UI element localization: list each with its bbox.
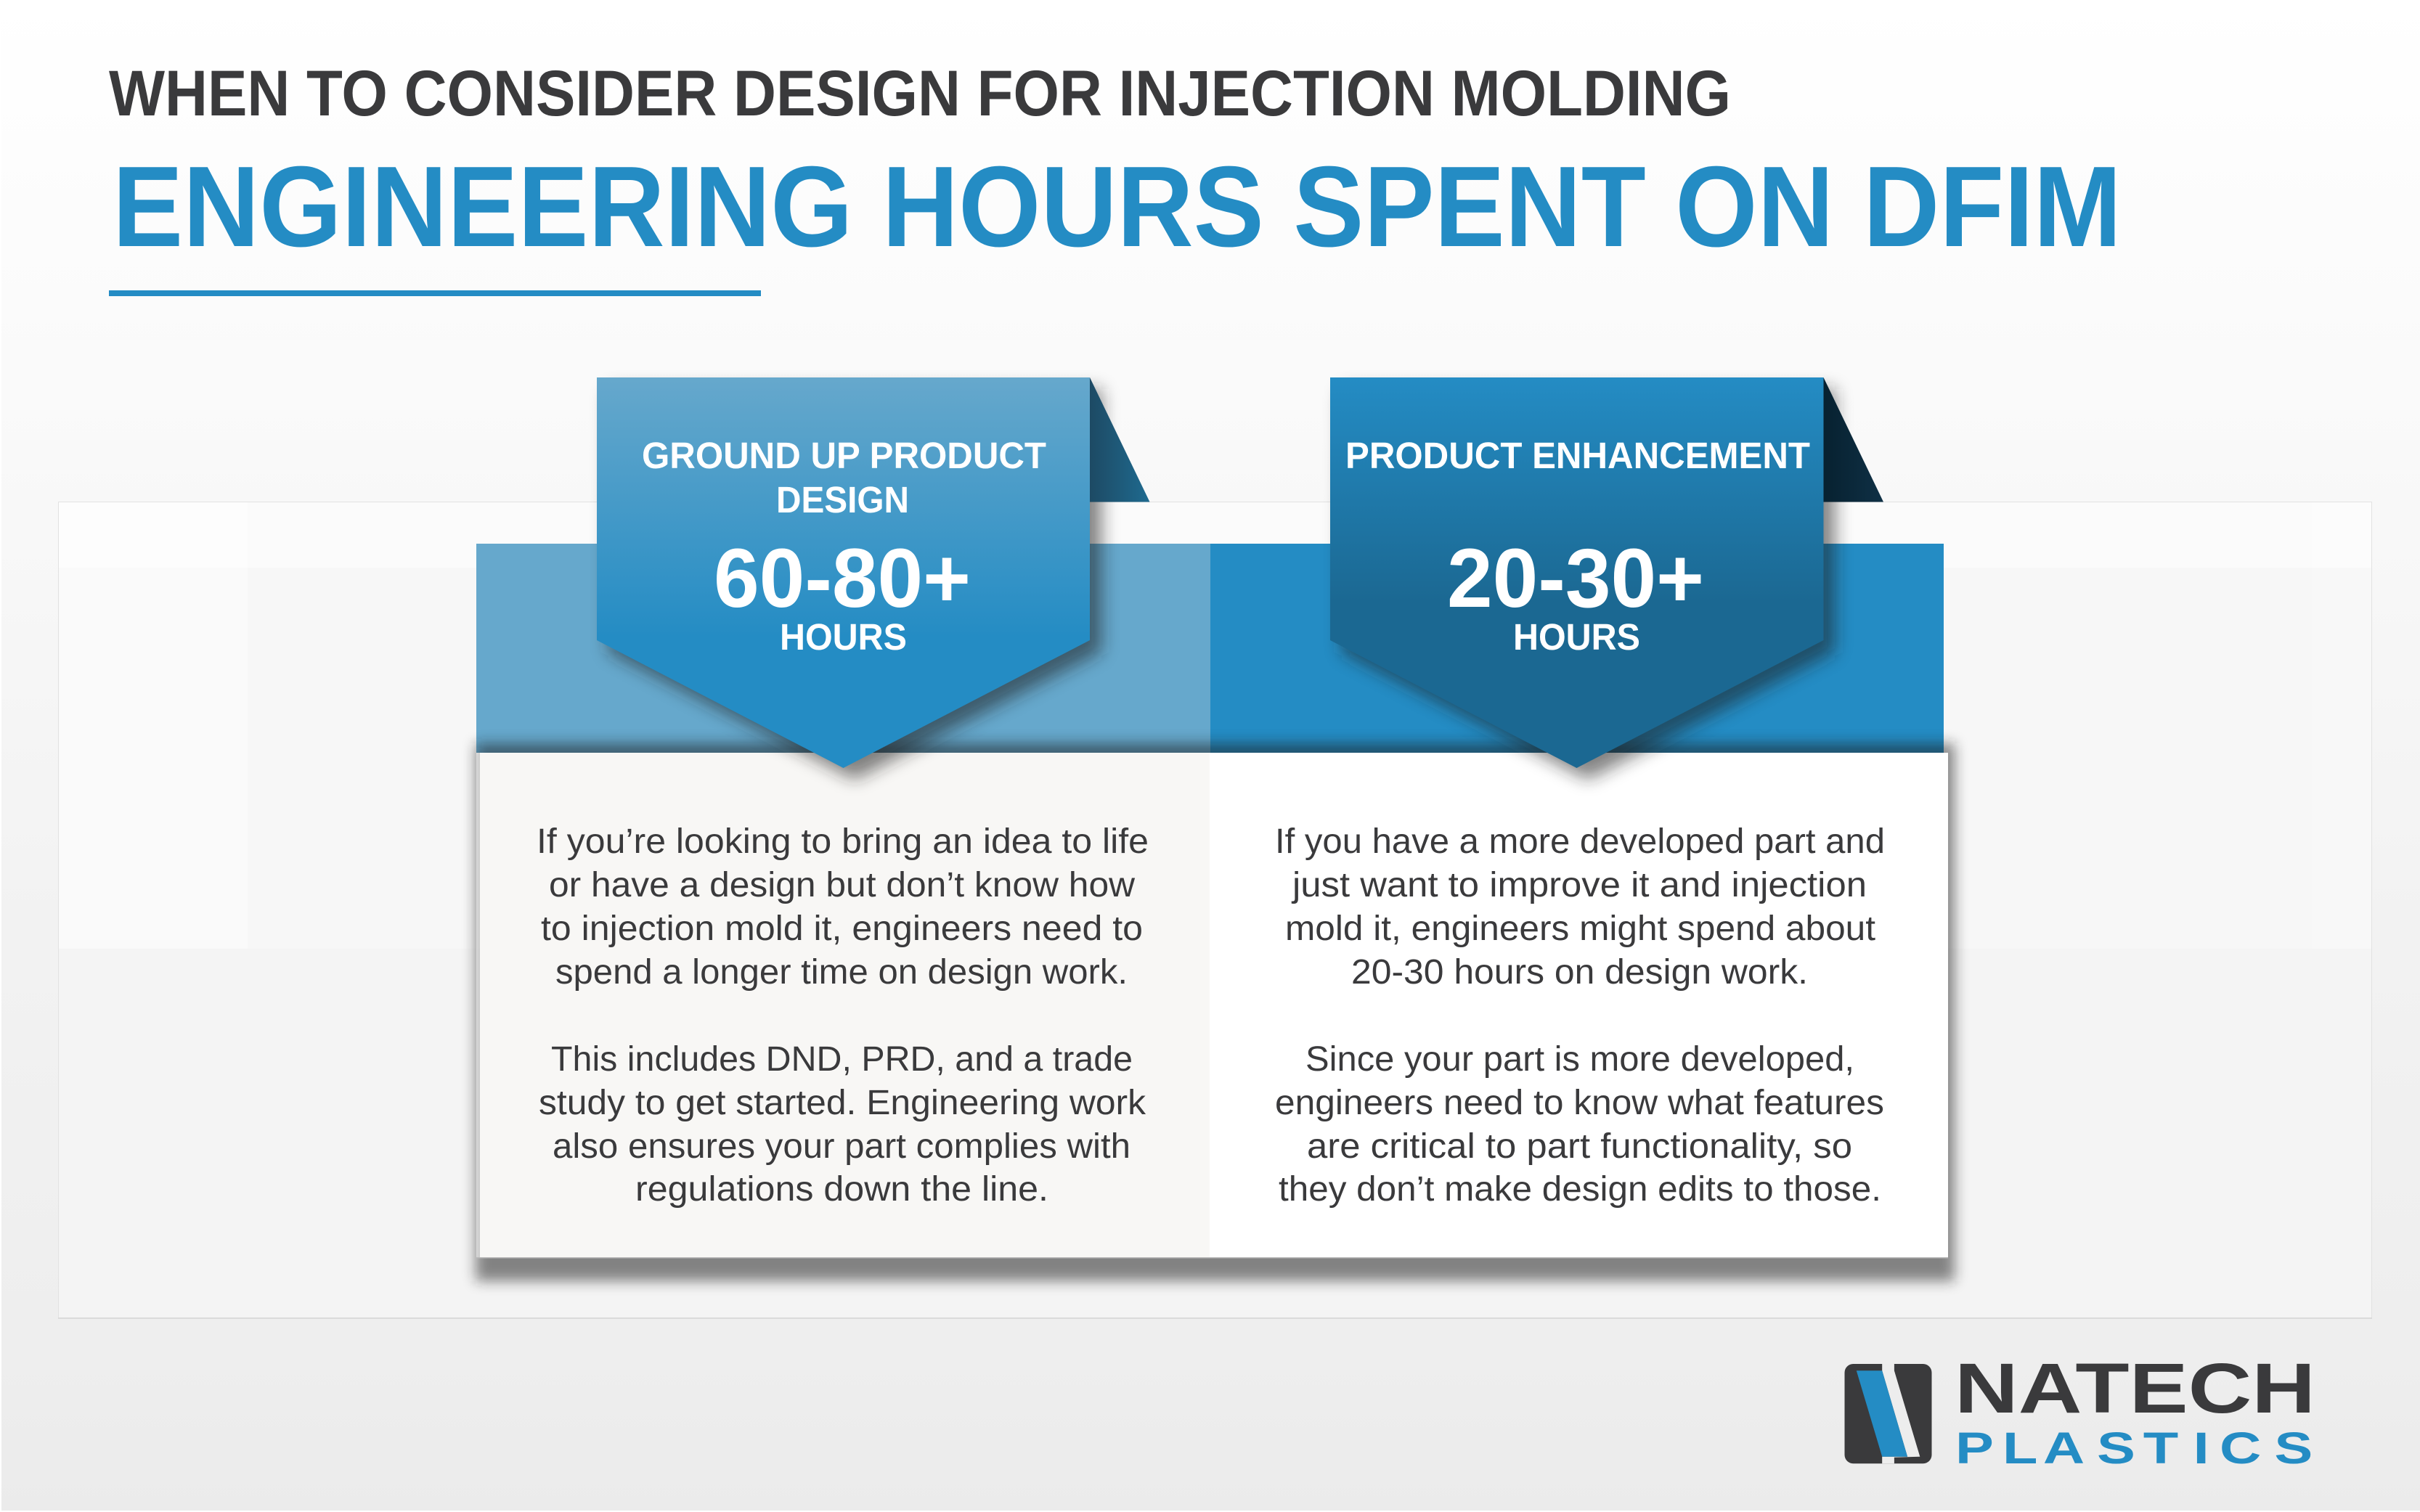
right column text: engineers need to know what features: [1275, 1084, 1884, 1122]
logo: natech plastics: [1844, 1349, 2315, 1473]
left column text: spend a longer time on design work.: [555, 953, 1128, 992]
logo wordmark natech: NATECH: [1955, 1349, 2315, 1428]
ribbon: ground up product design: [597, 377, 1150, 780]
background panel: [58, 502, 2372, 1319]
left column text: regulations down the line.: [635, 1170, 1048, 1209]
ribbon: ground up product design: 60-80+: [714, 532, 971, 625]
ribbon: product enhancement: 20-30+: [1447, 532, 1704, 625]
left column text: [537, 822, 1149, 1209]
header band: [476, 544, 1944, 753]
left column text: If you’re looking to bring an idea to life: [537, 822, 1149, 861]
comparison card: [476, 753, 1948, 1259]
right column text: Since your part is more developed,: [1305, 1040, 1854, 1079]
ribbon: product enhancement: HOURS: [1513, 616, 1640, 658]
title: engineering hours: ENGINEERING HOURS SPENT ON DFIM: [113, 143, 2122, 271]
title underline: [109, 290, 761, 296]
card shadow: [476, 743, 1955, 1281]
left column text: or have a design but don’t know how: [549, 866, 1135, 904]
icon: logo mark: [1844, 1364, 1931, 1463]
right column text: mold it, engineers might spend about: [1285, 910, 1875, 948]
heading: when to consider: WHEN TO CONSIDER DESIGN FOR INJECTION MOLDING: [109, 57, 1731, 129]
left column text: also ensures your part complies with: [553, 1127, 1130, 1166]
ribbon: ground up product design: HOURS: [780, 616, 907, 658]
left column text: to injection mold it, engineers need to: [541, 910, 1143, 948]
right column text: 20-30 hours on design work.: [1351, 953, 1808, 992]
right column text: [1275, 822, 1885, 1209]
right column text: just want to improve it and injection: [1291, 866, 1867, 904]
right column text: If you have a more developed part and: [1275, 822, 1885, 861]
left column text: This includes DND, PRD, and a trade: [551, 1040, 1133, 1079]
ribbon: product enhancement: [1330, 377, 1883, 780]
ribbon: product enhancement: PRODUCT ENHANCEMENT: [1345, 435, 1810, 476]
logo wordmark plastics: PLASTICS: [1955, 1423, 2313, 1473]
right column text: they don’t make design edits to those.: [1279, 1170, 1881, 1209]
ribbon: ground up product design: GROUND UP PRODUCT: [642, 435, 1046, 476]
ribbon: ground up product design: DESIGN: [776, 479, 909, 520]
right column text: are critical to part functionality, so: [1307, 1127, 1852, 1166]
left column text: study to get started. Engineering work: [539, 1084, 1146, 1122]
